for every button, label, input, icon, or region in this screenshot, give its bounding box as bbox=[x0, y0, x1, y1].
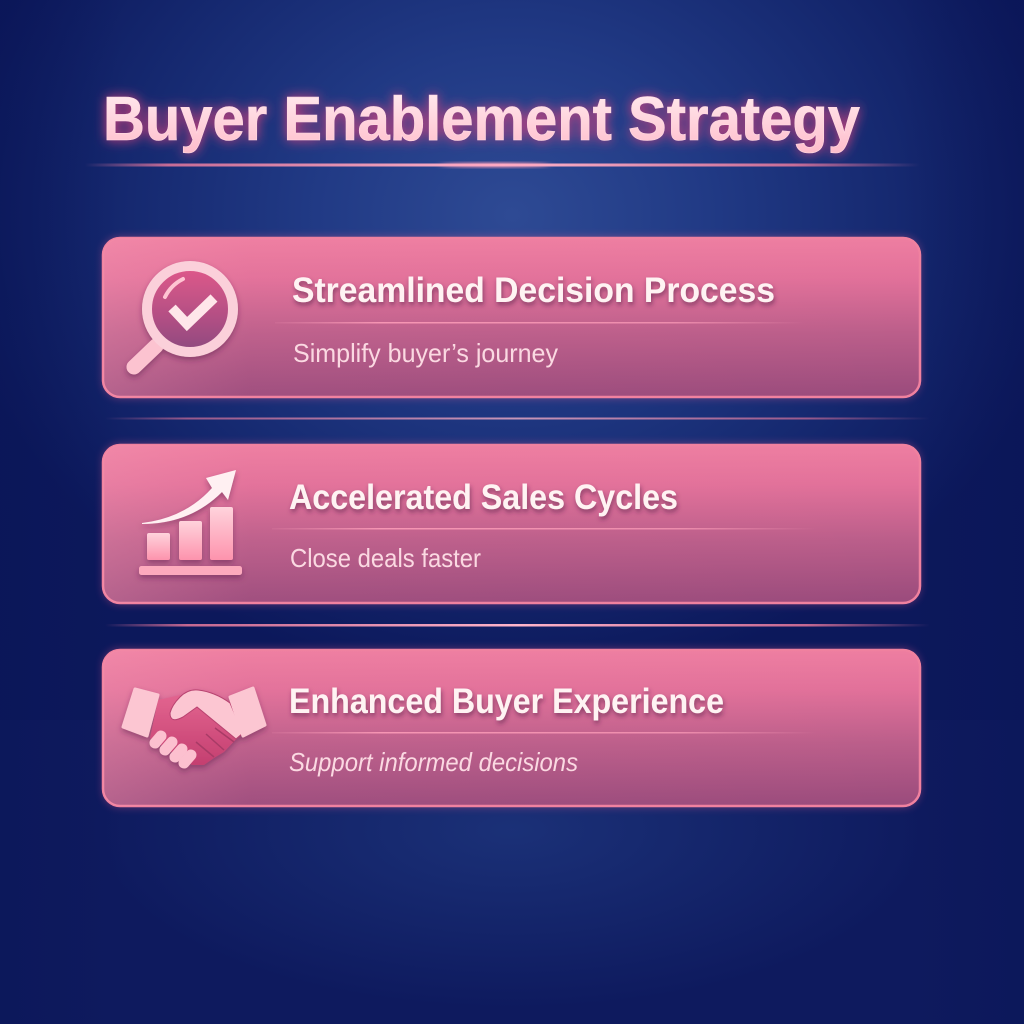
description: Support informed decisions bbox=[289, 747, 578, 777]
heading: Streamlined Decision Process bbox=[292, 271, 775, 310]
panel: accelerated sales cycles bbox=[102, 443, 921, 605]
heading: Enhanced Buyer Experience bbox=[289, 682, 724, 721]
title: Buyer Enablement Strategy bbox=[103, 85, 860, 154]
panel: streamlined decision process bbox=[102, 236, 921, 399]
icon: handshake bbox=[123, 688, 265, 765]
heading: Accelerated Sales Cycles bbox=[289, 478, 678, 517]
panel: enhanced buyer experience bbox=[102, 648, 921, 808]
icon: growth chart with arrow bbox=[139, 470, 242, 575]
description: Close deals faster bbox=[290, 543, 481, 573]
description: Simplify buyer’s journey bbox=[293, 338, 558, 368]
icon: magnifying glass with check bbox=[134, 266, 233, 367]
title: Buyer Enablement Strategy bbox=[103, 85, 860, 154]
